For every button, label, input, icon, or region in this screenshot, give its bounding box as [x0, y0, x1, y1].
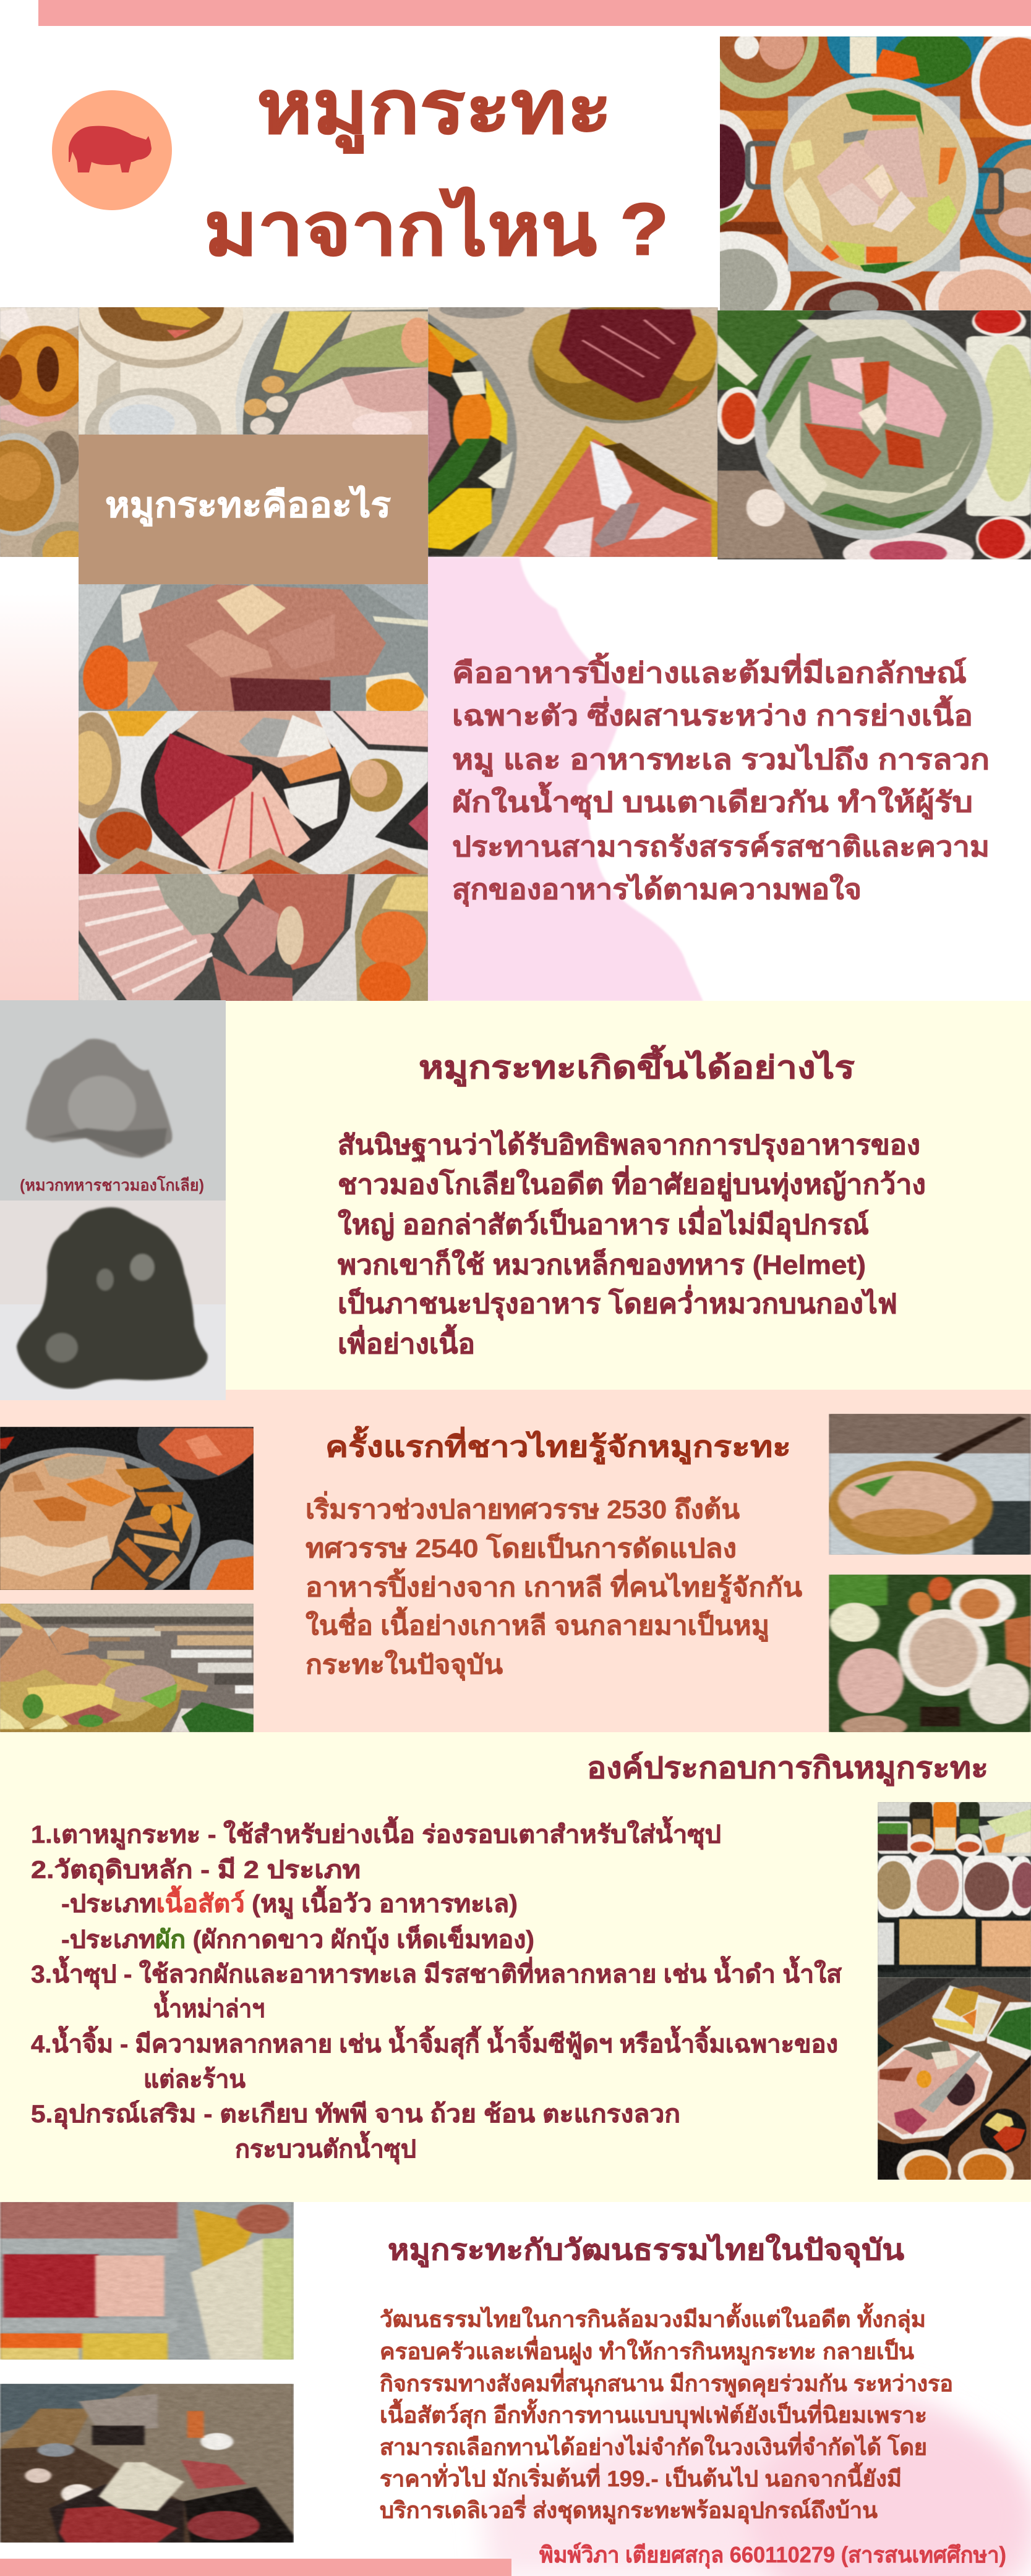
- text: components list: 3.น้ำซุป - ใช้ลวกผักและอาหารทะเล มีรสชาติที่หลากหลาย เช่น น้ำดำ น้ำใส: [31, 1956, 842, 1990]
- text: first known: กระทะในปัจจุบัน: [306, 1649, 503, 1681]
- text: first known: อาหารปิ้งย่างจาก เกาหลี ที่คนไทยรู้จักกัน: [306, 1568, 802, 1604]
- text: culture: เนื้อสัตว์สุก อีกทั้งการทานแบบบุฟเฟ่ต์ยังเป็นที่นิยมเพราะ: [380, 2399, 927, 2429]
- text: what is mookata: หมู และ อาหารทะเล รวมไปถึง การลวก: [452, 743, 990, 777]
- heading box: what is mookata: หมูกระทะคืออะไร: [105, 485, 391, 527]
- photo: grilled pork on pan: [79, 584, 428, 713]
- text: components list: -ประเภทผัก (ผักกาดขาว ผักบุ้ง เห็ดเข็มทอง): [61, 1924, 534, 1955]
- text: culture: สามารถเลือกทานได้อย่างไม่จำกัดในวงเงินที่จำกัดได้ โดย: [380, 2431, 927, 2460]
- text: culture: ราคาทั่วไป มักเริ่มต้นที่ 199.- เป็นต้นไป นอกจากนี้ยังมี: [380, 2462, 902, 2491]
- heading: first time Thai people knew mookata: ครั้งแรกที่ชาวไทยรู้จักหมูกระทะ: [325, 1426, 791, 1464]
- text: origin: ชาวมองโกเลียในอดีต ที่อาศัยอยู่บนทุ่งหญ้ากว้าง: [338, 1165, 926, 1202]
- photo: pork hotpot with sauces: [716, 306, 1031, 574]
- text: culture: วัฒนธรรมไทยในการกินล้อมวงมีมาตั้งแต่ในอดีต ทั้งกลุ่ม: [380, 2303, 926, 2334]
- top bar: [38, 0, 1031, 26]
- photo: prepared raw food trays: [876, 1802, 1031, 1978]
- text: what is mookata: [452, 652, 990, 907]
- text: what is mookata: ผักในน้ำซุป บนเตาเดียวกัน ทำให้ผู้รับ: [452, 781, 973, 820]
- text: components list: น้ำหม่าล่าฯ: [153, 1991, 265, 2023]
- text: origin: เพื่อย่างเนื้อ: [338, 1324, 475, 1359]
- photo: beef, seafood tray on table: [428, 300, 718, 557]
- panel: culture paint background: [482, 2365, 1031, 2576]
- heading: mookata and Thai culture: หมูกระทะกับวัฒนธรรมไทยในปัจจุบัน: [388, 2233, 905, 2268]
- text: culture: กิจกรรมทางสังคมที่สนุกสนาน มีการพูดคุยร่วมกัน ระหว่างรอ: [380, 2368, 953, 2398]
- panel: first known peach background: [0, 1390, 1031, 1732]
- title: มาจากไหน ?: [204, 187, 669, 271]
- text: culture: [380, 2303, 953, 2525]
- heading box: what is mookata: [79, 435, 428, 584]
- photo: raw sliced beef and seafood platter: [63, 710, 428, 874]
- text: first known: ในชื่อ เนื้อย่างเกาหลี จนกลายมาเป็นหมู: [306, 1606, 769, 1642]
- caption: (หมวกทหารชาวมองโกเลีย): [20, 1175, 204, 1194]
- photo: side dishes left strip: [0, 307, 103, 579]
- text: culture: ครอบครัวและเพื่อนฝูง ทำให้การกินหมูกระทะ กลายเป็น: [380, 2336, 914, 2366]
- text: first known: ทศวรรษ 2540 โดยเป็นการดัดแปลง: [306, 1532, 737, 1563]
- signature: พิมพ์วิภา เตียยศสกุล 660110279 (สารสนเทศศึกษา): [539, 2542, 1006, 2569]
- photo: grilled meat on black table: [0, 1397, 276, 1630]
- heading: how mookata began: หมูกระทะเกิดขึ้นได้อย่างไร: [419, 1045, 855, 1087]
- text: components list: กระบวนตักน้ำซุป: [235, 2131, 416, 2165]
- text: origin: ใหญ่ ออกล่าสัตว์เป็นอาหาร เมื่อไม่มีอุปกรณ์: [338, 1205, 869, 1242]
- text: first known: [306, 1491, 802, 1681]
- text: components list: 5.อุปกรณ์เสริม - ตะเกียบ ทัพพี จาน ถ้วย ช้อน ตะแกรงลวก: [31, 2100, 680, 2130]
- icon: pig in circle: [52, 90, 172, 210]
- text: what is mookata: สุกของอาหารได้ตามความพอใจ: [452, 873, 862, 907]
- text: components list: -ประเภทเนื้อสัตว์ (หมู เนื้อวัว อาหารทะเล): [61, 1885, 518, 1919]
- text: origin: พวกเขาก็ใช้ หมวกเหล็กของทหาร (Helmet): [338, 1248, 866, 1280]
- text: culture: บริการเดลิเวอรี่ ส่งชุดหมูกระทะพร้อมอุปกรณ์ถึงบ้าน: [380, 2494, 878, 2525]
- text: origin: เป็นภาชนะปรุงอาหาร โดยคว่ำหมวกบนกองไฟ: [338, 1285, 897, 1321]
- photo: pork belly with shrimp: [79, 874, 428, 1005]
- text: what is mookata: ประทานสามารถรังสรรค์รสชาติและความ: [452, 831, 990, 862]
- text: components list: 2.วัตถุดิบหลัก - มี 2 ประเภท: [31, 1856, 361, 1885]
- panel: origin cream background: [226, 1001, 1031, 1390]
- text: components list: 1.เตาหมูกระทะ - ใช้สำหรับย่างเนื้อ ร่องรอบเตาสำหรับใส่น้ำซุป: [31, 1816, 721, 1850]
- panel: what is mookata background paint: [0, 557, 703, 1001]
- text: components list: [31, 1816, 842, 2165]
- text: what is mookata: คืออาหารปิ้งย่างและต้มที่มีเอกลักษณ์: [452, 652, 967, 689]
- photo: faded shabu plates: [79, 267, 434, 474]
- heading: components: องค์ประกอบการกินหมูกระทะ: [587, 1751, 988, 1787]
- photo: plate on wooden table with sauces: [878, 1978, 1031, 2191]
- text: first known: เริ่มราวช่วงปลายทศวรรษ 2530 ถึงต้น: [306, 1491, 740, 1524]
- panel: components cream background: [0, 1732, 1031, 2202]
- title: [204, 66, 669, 271]
- photo: brass pan with shabu: [828, 1414, 1031, 1555]
- text: origin: [338, 1129, 926, 1359]
- photo: korean bbq pan at restaurant: [0, 1604, 254, 1732]
- bottom bar: [0, 2559, 511, 2576]
- text: origin: สันนิษฐานว่าได้รับอิทธิพลจากการปรุงอาหารของ: [338, 1129, 920, 1162]
- text: what is mookata: เฉพาะตัว ซึ่งผสานระหว่าง การย่างเนื้อ: [452, 695, 973, 731]
- photo: iron helmet: [0, 1201, 226, 1400]
- text: components list: 4.น้ำจิ้ม - มีความหลากหลาย เช่น น้ำจิ้มสุกี้ น้ำจิ้มซีฟู้ดฯ หรือน้ำจิ้มเฉพาะของ: [31, 2026, 838, 2060]
- photo: mongol helmet with caption: [0, 1000, 226, 1201]
- title: หมูกระทะ: [257, 66, 612, 153]
- photo: outdoor mookata table: [0, 2384, 294, 2543]
- photo: hotpot with side plates: [674, 0, 1031, 349]
- text: components list: แต่ละร้าน: [143, 2066, 246, 2093]
- photo: mookata spread with vegetables: [829, 1575, 1031, 1737]
- photo: packaged meat and vegetables: [0, 2202, 294, 2360]
